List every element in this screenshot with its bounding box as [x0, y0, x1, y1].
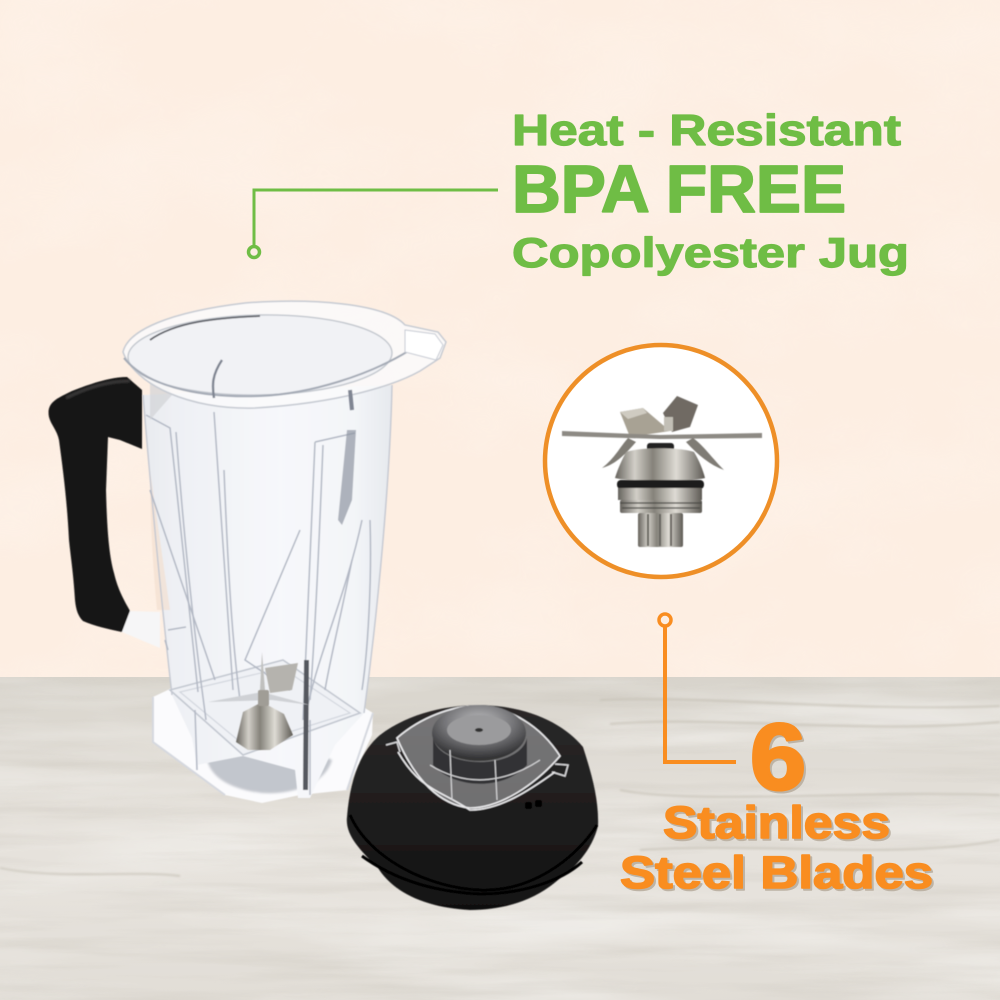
orange callout line	[659, 614, 736, 762]
green callout line	[248, 190, 498, 258]
heading: heat resistant BPA free jug: BPA FREE	[512, 152, 846, 227]
heading: six stainless steel blades: Stainless	[663, 797, 890, 848]
blade detail circle	[545, 345, 777, 577]
icon: steel blade assembly	[562, 396, 762, 547]
marble countertop	[0, 677, 1000, 1000]
heading: six stainless steel blades	[620, 704, 933, 898]
heading: heat resistant BPA free jug: Heat - Resistant	[512, 106, 901, 155]
heading: six stainless steel blades: 6	[750, 704, 806, 809]
jug inner ribs	[146, 412, 371, 795]
jug body	[143, 345, 392, 798]
background wall	[0, 0, 1000, 680]
small blade inside jug	[208, 652, 310, 750]
heading: six stainless steel blades: Steel Blades	[620, 847, 933, 898]
lid	[347, 705, 598, 910]
lid vent holes	[525, 800, 542, 809]
heading: heat resistant BPA free jug	[512, 106, 909, 276]
jug base	[153, 688, 373, 803]
jug rim and spout	[123, 301, 446, 410]
heading: heat resistant BPA free jug: Copolyester Jug	[512, 229, 909, 276]
jug handle	[49, 377, 160, 648]
clear lid cap	[386, 705, 568, 810]
